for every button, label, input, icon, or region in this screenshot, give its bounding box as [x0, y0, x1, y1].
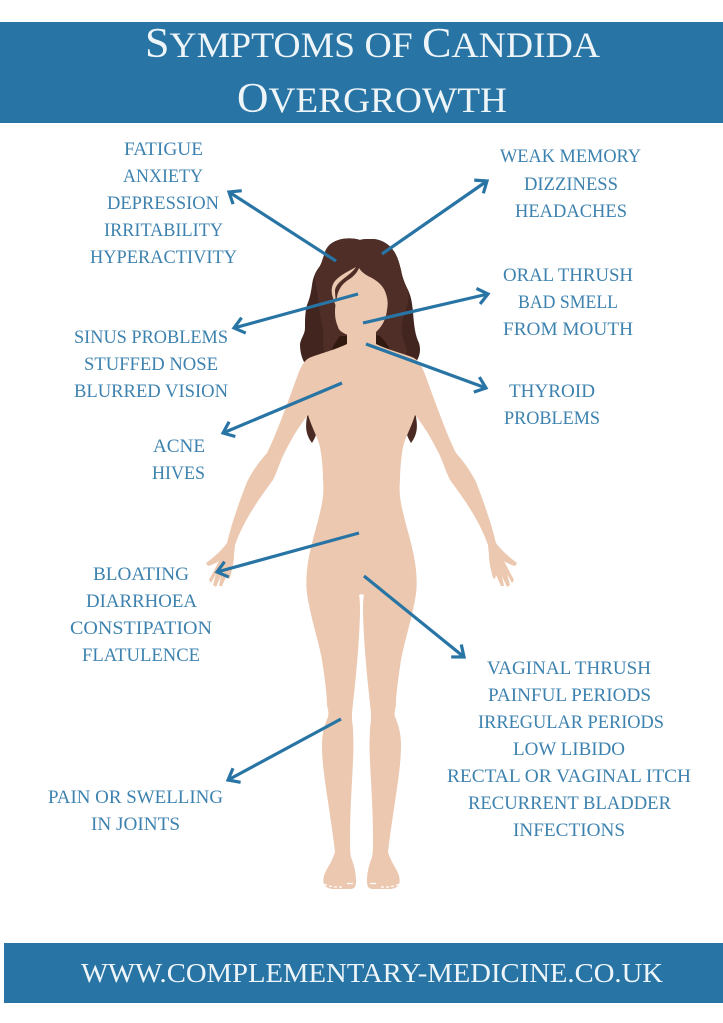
- text block: vaginal symptoms: IRREGULAR PERIODS: [478, 712, 664, 733]
- text block: vaginal symptoms: RECURRENT BLADDER: [468, 793, 671, 814]
- arrow: to vaginal symptoms: [364, 576, 464, 657]
- female body figure: [206, 238, 517, 889]
- text block: memory symptoms: WEAK MEMORY: [500, 146, 641, 167]
- text block: skin symptoms: HIVES: [152, 463, 205, 484]
- text block: vaginal symptoms: VAGINAL THRUSH: [487, 658, 651, 679]
- text block: mood symptoms: ANXIETY: [123, 166, 203, 187]
- body right half: [360, 330, 517, 889]
- arrow: to mood symptoms: [229, 192, 336, 261]
- website address: WWW.COMPLEMENTARY-MEDICINE.CO.UK: [81, 958, 664, 988]
- arrow: to memory symptoms: [382, 181, 487, 254]
- text block: skin symptoms: ACNE: [153, 436, 205, 457]
- arrow: to skin symptoms: [223, 383, 342, 433]
- hair strand highlight: [332, 267, 356, 309]
- text block: digestive symptoms: CONSTIPATION: [70, 618, 212, 639]
- toe marks: [324, 884, 353, 887]
- text block: vaginal symptoms: [447, 658, 691, 841]
- title banner: [0, 21, 723, 123]
- text block: memory symptoms: DIZZINESS: [524, 174, 618, 195]
- text block: vaginal symptoms: RECTAL OR VAGINAL ITCH: [447, 766, 691, 787]
- text block: digestive symptoms: [70, 564, 212, 666]
- text block: mood symptoms: [90, 139, 237, 268]
- footer banner: [4, 943, 723, 1003]
- text block: sinus symptoms: [74, 327, 228, 402]
- text block: memory symptoms: [500, 146, 641, 222]
- text block: joint symptoms: PAIN OR SWELLING: [48, 787, 223, 808]
- hair outer lobes: [300, 238, 420, 362]
- text block: vaginal symptoms: PAINFUL PERIODS: [488, 685, 651, 706]
- text block: joint symptoms: [48, 787, 223, 835]
- text block: oral symptoms: BAD SMELL: [518, 292, 618, 313]
- arrow: to sinus symptoms: [234, 294, 358, 328]
- arrow: to joint symptoms: [228, 719, 341, 780]
- text block: mood symptoms: HYPERACTIVITY: [90, 247, 237, 268]
- face: [335, 268, 388, 342]
- text block: vaginal symptoms: INFECTIONS: [513, 820, 625, 841]
- text block: digestive symptoms: DIARRHOEA: [86, 591, 197, 612]
- text block: mood symptoms: DEPRESSION: [107, 193, 219, 214]
- text block: thyroid: [504, 381, 600, 429]
- text block: thyroid: THYROID: [509, 381, 595, 402]
- text block: joint symptoms: IN JOINTS: [91, 814, 180, 835]
- text block: vaginal symptoms: LOW LIBIDO: [513, 739, 625, 760]
- text block: digestive symptoms: BLOATING: [93, 564, 189, 585]
- hair shadow at neck: [331, 334, 391, 352]
- text block: oral symptoms: [503, 265, 633, 340]
- hair main: [315, 238, 409, 356]
- text block: oral symptoms: ORAL THRUSH: [503, 265, 633, 286]
- arrow: to thyroid: [366, 344, 486, 388]
- text block: sinus symptoms: SINUS PROBLEMS: [74, 327, 228, 348]
- title: SYMPTOMS OF CANDIDA: [145, 21, 593, 67]
- text block: digestive symptoms: FLATULENCE: [82, 645, 200, 666]
- hair behind arms: [306, 412, 417, 443]
- text block: skin symptoms: [152, 436, 205, 484]
- text block: sinus symptoms: BLURRED VISION: [74, 381, 228, 402]
- text block: sinus symptoms: STUFFED NOSE: [84, 354, 218, 375]
- arrow: to oral symptoms: [363, 294, 488, 323]
- text block: memory symptoms: HEADACHES: [515, 201, 627, 222]
- text block: mood symptoms: FATIGUE: [124, 139, 203, 160]
- arrow: to digestive symptoms: [217, 533, 359, 572]
- title: OVERGROWTH: [237, 76, 498, 122]
- text block: thyroid: PROBLEMS: [504, 408, 600, 429]
- text block: mood symptoms: IRRITABILITY: [104, 220, 223, 241]
- body left half: [206, 330, 362, 889]
- text block: oral symptoms: FROM MOUTH: [503, 319, 633, 340]
